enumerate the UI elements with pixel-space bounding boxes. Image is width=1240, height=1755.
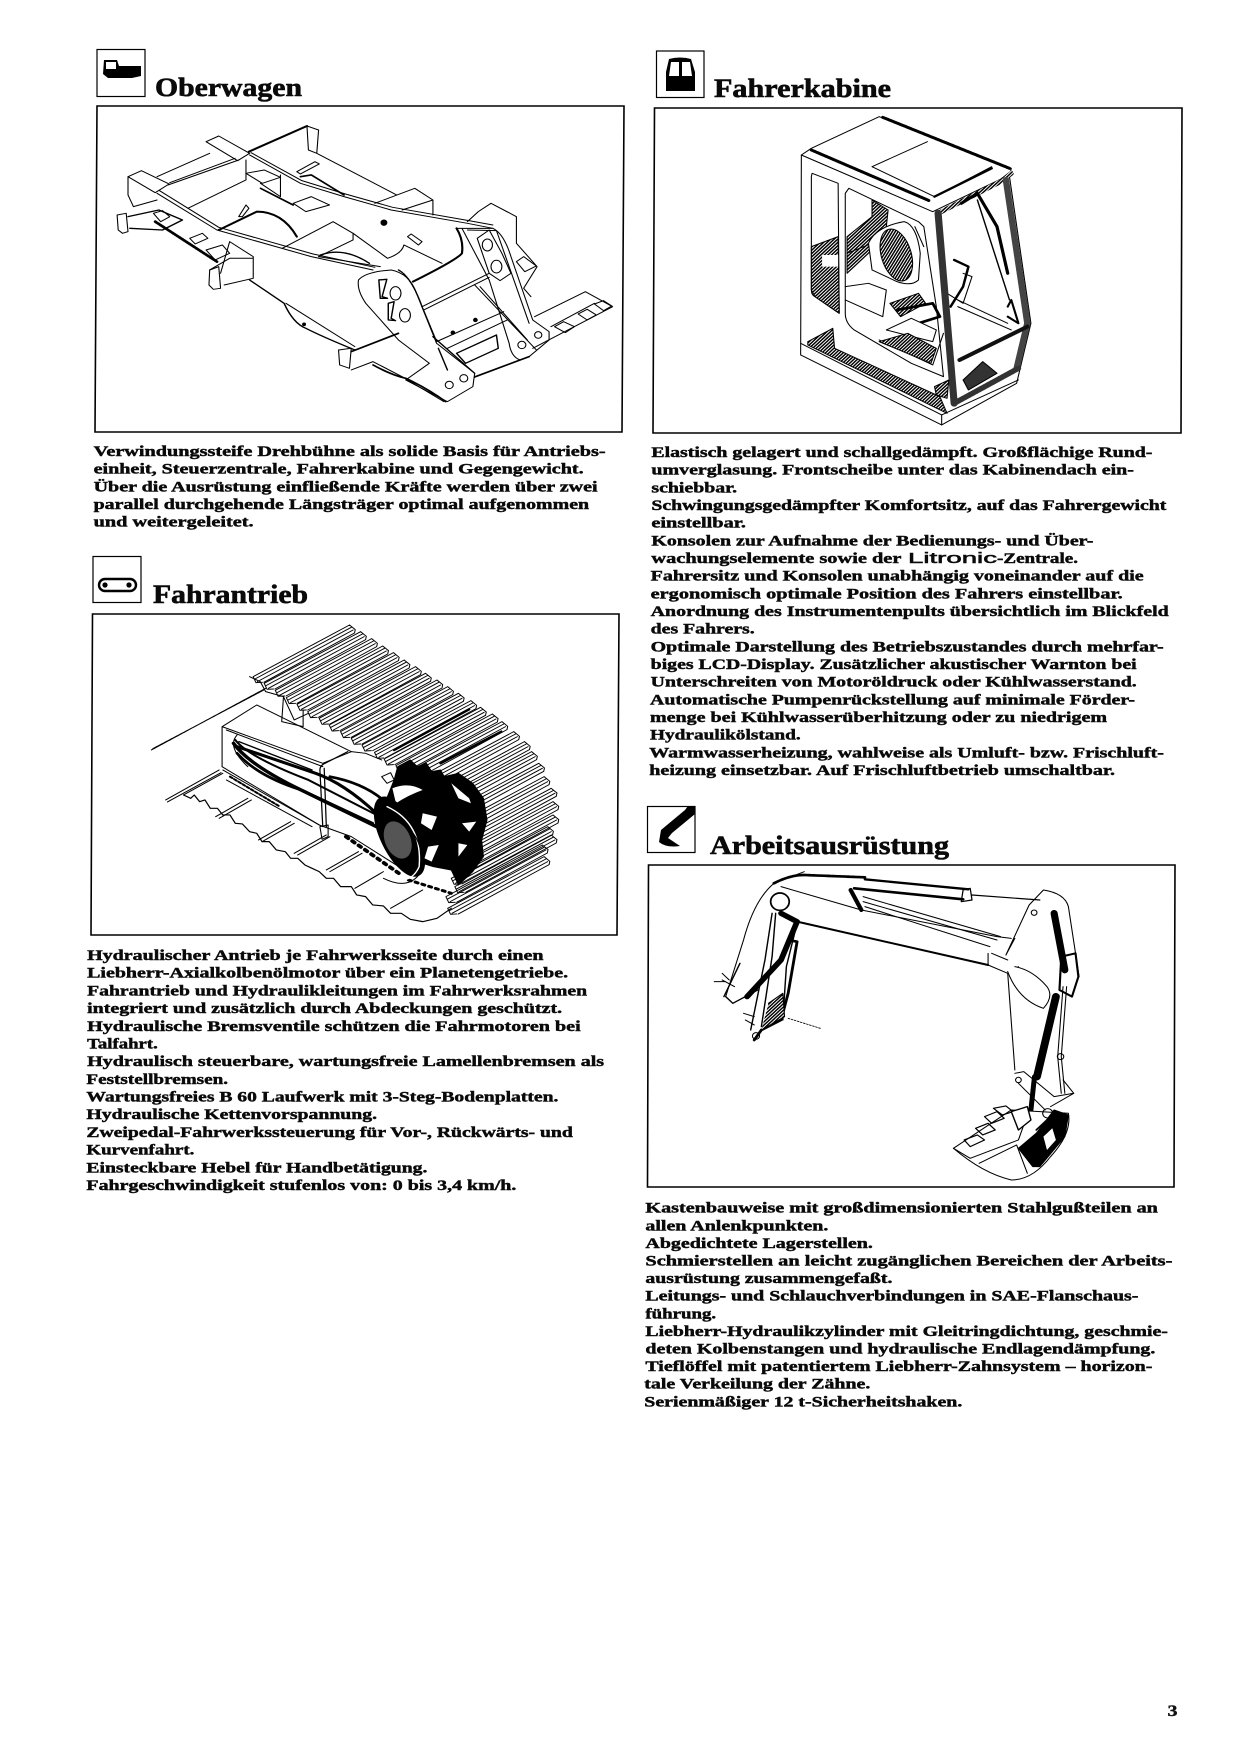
text block: Fahrantrieb description: Feststellbremsen. xyxy=(86,1072,228,1088)
text block: Fahrerkabine description: Unterschreiten von Motoröldruck oder Kühlwasserstand. xyxy=(651,675,1137,691)
text block: Fahrerkabine description: ergonomisch optimale Position des Fahrers einstellbar. xyxy=(651,586,1123,602)
text block: Arbeitsausrüstung description: ausrüstung zusammengefaßt. xyxy=(645,1271,893,1287)
text block: Oberwagen description: parallel durchgehende Längsträger optimal aufgenommen xyxy=(94,497,590,513)
text block: Fahrerkabine description: wachungselemente sowie der xyxy=(651,551,902,567)
text block: Fahrerkabine description: menge bei Kühlwasserüberhitzung oder zu niedrigem xyxy=(650,710,1108,726)
text block: Fahrantrieb description: Hydraulischer Antrieb je Fahrwerksseite durch einen xyxy=(87,948,544,964)
heading: Fahrerkabine: Fahrerkabine xyxy=(714,74,891,103)
illustration: excavator boom, stick and bucket xyxy=(714,872,1079,1180)
text block: Arbeitsausrüstung description: tale Verkeilung der Zähne. xyxy=(644,1377,871,1393)
text block: Fahrerkabine description xyxy=(649,445,1170,779)
section: Arbeitsausrüstung xyxy=(644,806,1175,1410)
icon: crawler track xyxy=(93,556,141,602)
text block: Fahrerkabine description: Warmwasserheizung, wahlweise als Umluft- bzw. Frischluft- xyxy=(649,745,1164,761)
text block: Fahrerkabine description: Fahrersitz und Konsolen unabhängig voneinander auf die xyxy=(651,569,1144,585)
text block: Arbeitsausrüstung description xyxy=(644,1201,1172,1410)
section: Fahrantrieb xyxy=(86,556,619,1194)
text block: Fahrantrieb description: integriert und zusätzlich durch Abdeckungen geschützt. xyxy=(87,1001,562,1017)
text block: Fahrerkabine description: Automatische Pumpenrückstellung auf minimale Förder- xyxy=(650,692,1135,708)
text block: Arbeitsausrüstung description: Leitungs- und Schlauchverbindungen in SAE-Flanschaus- xyxy=(645,1289,1138,1305)
text block: Fahrantrieb description: Talfahrt. xyxy=(87,1036,158,1052)
text block: Fahrantrieb description: Hydraulisch steuerbare, wartungsfreie Lamellenbremsen als xyxy=(87,1054,604,1070)
text block: Fahrantrieb description: Zweipedal-Fahrwerkssteuerung für Vor-, Rückwärts- und xyxy=(86,1125,574,1141)
text block: Oberwagen description: Über die Ausrüstung einfließende Kräfte werden über zwei xyxy=(94,478,598,495)
text block: Fahrerkabine description: umverglasung. Frontscheibe unter das Kabinendach ein- xyxy=(651,463,1134,479)
text block: Fahrantrieb description: Kurvenfahrt. xyxy=(86,1143,195,1159)
text block: Oberwagen description xyxy=(94,444,606,531)
text block: Fahrerkabine description: Konsolen zur Aufnahme der Bedienungs- und Über- xyxy=(651,532,1093,549)
text block: Fahrerkabine description: Hydraulikölstand. xyxy=(650,728,801,744)
text block: Fahrerkabine description: einstellbar. xyxy=(651,516,746,532)
text block: Arbeitsausrüstung description: Abgedichtete Lagerstellen. xyxy=(645,1236,873,1252)
text block: Arbeitsausrüstung description: führung. xyxy=(645,1306,716,1322)
panel: cab drawing xyxy=(653,108,1182,433)
text block: Fahrantrieb description: Wartungsfreies B 60 Laufwerk mit 3-Steg-Bodenplatten. xyxy=(86,1090,559,1106)
text block: Arbeitsausrüstung description: Kastenbauweise mit großdimensionierten Stahlgußteilen an xyxy=(645,1201,1159,1217)
icon: excavator arm xyxy=(648,806,695,852)
text block: Oberwagen description: Verwindungssteife Drehbühne als solide Basis für Antriebs- xyxy=(94,444,606,460)
text block: Fahrantrieb description: Fahrantrieb und Hydraulikleitungen im Fahrwerksrahmen xyxy=(87,983,588,999)
text block: Fahrerkabine description: Litronic xyxy=(908,550,998,567)
text block: Arbeitsausrüstung description: allen Anlenkpunkten. xyxy=(645,1218,829,1234)
illustration: driver cab xyxy=(801,117,1031,425)
icon: cab xyxy=(656,51,704,98)
text block: Fahrantrieb description: Fahrgeschwindigkeit stufenlos von: 0 bis 3,4 km/h. xyxy=(86,1178,517,1194)
heading: Arbeitsausrüstung: Arbeitsausrüstung xyxy=(710,831,949,860)
text block: Arbeitsausrüstung description: Tieflöffel mit patentiertem Liebherr-Zahnsystem – horizon- xyxy=(645,1359,1152,1375)
text block: Fahrerkabine description: heizung einsetzbar. Auf Frischluftbetrieb umschaltbar. xyxy=(649,763,1115,779)
text block: Fahrerkabine description: biges LCD-Display. Zusätzlicher akustischer Warnton bei xyxy=(651,657,1137,673)
text block: Fahrantrieb description: Hydraulische Bremsventile schützen die Fahrmotoren bei xyxy=(87,1019,581,1035)
text block: Fahrerkabine description: Anordnung des Instrumentenpults übersichtlich im Blickfeld xyxy=(651,604,1170,620)
text block: Fahrantrieb description: Liebherr-Axialkolbenölmotor über ein Planetengetriebe. xyxy=(87,966,568,982)
panel: undercarriage frame drawing xyxy=(95,106,624,432)
heading: Fahrantrieb: Fahrantrieb xyxy=(153,580,308,609)
text block: Fahrerkabine description: Optimale Darstellung des Betriebszustandes durch mehrfar- xyxy=(651,639,1164,655)
page number: 3 xyxy=(1168,1703,1178,1720)
text block: Arbeitsausrüstung description: Serienmäßiger 12 t-Sicherheitshaken. xyxy=(644,1394,963,1410)
section: Fahrerkabine xyxy=(649,51,1182,779)
text block: Fahrerkabine description: Schwingungsgedämpfter Komfortsitz, auf das Fahrergewicht xyxy=(651,498,1166,514)
heading: Oberwagen: Oberwagen xyxy=(155,73,303,102)
text block: Fahrerkabine description: -Zentrale. xyxy=(997,551,1078,567)
text block: Arbeitsausrüstung description: deten Kolbenstangen und hydraulische Endlagendämpfung. xyxy=(645,1342,1156,1358)
text block: Fahrerkabine description: des Fahrers. xyxy=(651,622,755,638)
illustration: welded turntable frame xyxy=(117,126,613,402)
icon: upper carriage xyxy=(97,50,145,96)
text block: Fahrerkabine description: schiebbar. xyxy=(651,480,737,496)
text block: Fahrerkabine description: Elastisch gelagert und schallgedämpft. Großflächige Rund- xyxy=(651,445,1152,461)
text block: Fahrantrieb description: Hydraulische Kettenvorspannung. xyxy=(86,1107,377,1123)
text block: Arbeitsausrüstung description: Liebherr-Hydraulikzylinder mit Gleitringdichtung, geschmie- xyxy=(645,1324,1168,1340)
text block: Oberwagen description: einheit, Steuerzentrale, Fahrerkabine und Gegengewicht. xyxy=(94,462,584,478)
text block: Fahrantrieb description: Einsteckbare Hebel für Handbetätigung. xyxy=(86,1160,428,1176)
text block: Fahrantrieb description xyxy=(86,948,604,1194)
section: Oberwagen xyxy=(94,50,624,531)
illustration: crawler track and drive sprocket xyxy=(151,625,559,922)
panel: travel drive drawing xyxy=(91,614,619,935)
text block: Oberwagen description: und weitergeleitet. xyxy=(94,515,254,531)
panel: boom and bucket drawing xyxy=(648,865,1175,1187)
text block: Arbeitsausrüstung description: Schmierstellen an leicht zugänglichen Bereichen der Arbeits- xyxy=(645,1254,1172,1270)
